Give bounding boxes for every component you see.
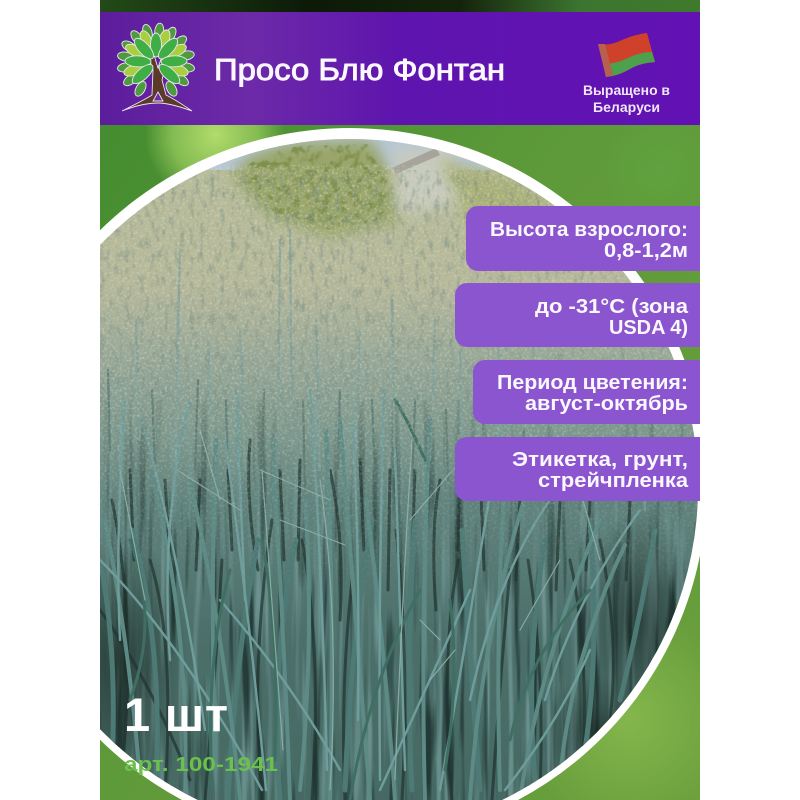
callout: height: 0,8-1,2м [604,240,688,262]
callout: flowering period: Период цветения: [497,372,688,394]
callout: package contents: Этикетка, грунт, [512,449,688,471]
article number: арт. 100-1941 [124,754,278,776]
callout: height [466,206,700,271]
callout: package contents [455,437,700,501]
callout: hardiness [455,283,700,347]
upright stems in the middle band [108,230,645,510]
leaves [117,23,195,98]
callout: package contents: стрейчпленка [538,470,689,492]
white circle frame [100,128,700,800]
grass blades [100,390,655,800]
logo: tree [117,23,195,111]
label: grown in Belarus: Выращено в [583,83,670,98]
callout: flowering period: август-октябрь [525,393,688,415]
header banner [100,12,700,125]
label: grown in Belarus [583,83,670,115]
callout: hardiness: USDA 4) [609,317,688,339]
sky and bushes behind grass [206,139,555,242]
trunk and ground [122,53,192,111]
callout: flowering period [473,360,700,424]
callout: height: Высота взрослого: [490,219,688,241]
quantity label: 1 шт [124,688,228,741]
title: Просо Блю Фонтан [214,52,505,87]
icon: flag of Belarus [598,33,655,77]
background: blurred green photo [100,0,700,800]
label: grown in Belarus: Беларуси [593,100,660,115]
callout: hardiness: до -31°C (зона [535,296,689,318]
photo: blue switchgrass in circle [48,139,700,800]
